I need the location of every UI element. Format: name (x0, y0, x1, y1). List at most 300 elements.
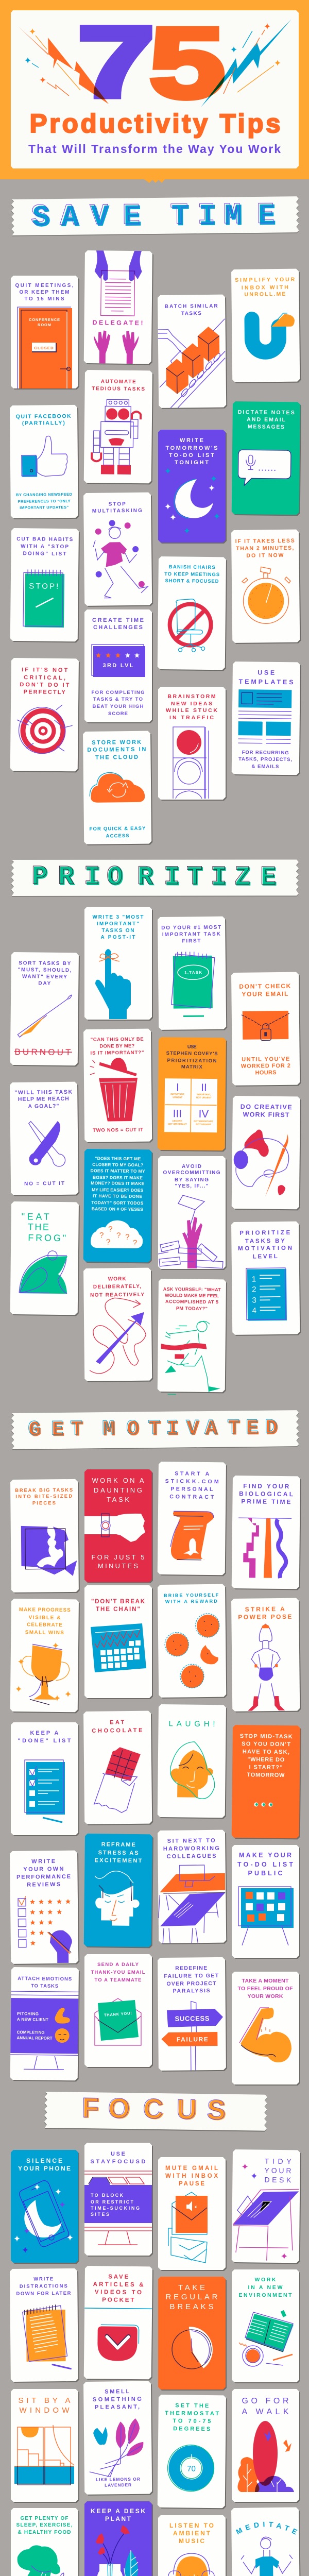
icon: stopwatch (242, 567, 291, 624)
heading: PREFERENCES TO "ONLY (18, 499, 71, 504)
heading: CELEBRATE (27, 1622, 62, 1628)
big number 75: 7 (78, 6, 154, 117)
heading: OVER PROJECT (166, 1980, 216, 1987)
icon: burnt match (18, 994, 72, 1038)
card: does this get me closer (83, 1149, 153, 1263)
card: stayfocusd (84, 2143, 153, 2257)
heading: CUT BAD HABITS (16, 536, 73, 543)
heading (90, 1037, 144, 1056)
heading: BRIBE YOURSELF (164, 1592, 219, 1598)
heading: PERFORMANCE (16, 1874, 71, 1880)
heading: PERFECTLY (24, 689, 66, 696)
chart: prioritization matrix: URGENT (173, 1096, 183, 1098)
heading: WOULD MAKE ME FEEL (165, 1293, 219, 1298)
heading (163, 1286, 221, 1311)
heading: (PARTIALLY) (22, 420, 65, 427)
icon: numbered list: 3 (252, 1296, 256, 1305)
icon: trees and butterflies (237, 2421, 294, 2492)
heading: HAVE TO ASK, (243, 1749, 289, 1755)
heading: SIMPLIFY YOUR (235, 277, 295, 283)
heading: EXCITEMENT (94, 1857, 142, 1864)
icon: thinking cloud: ? (133, 1239, 137, 1247)
heading (164, 1592, 219, 1604)
card: stop mid-task (232, 1725, 301, 1839)
heading: BANISH CHAIRS (169, 564, 215, 570)
heading: WORK (108, 1276, 127, 1282)
heading: THAN 2 MINUTES, (236, 545, 294, 552)
chart: prioritization matrix: NOT IMPORTANT (168, 1123, 187, 1126)
card: not critical (10, 658, 80, 772)
heading: DAY (38, 981, 51, 987)
heading (92, 1477, 144, 1503)
heading: CREATE TIME (92, 617, 144, 623)
heading: REDEFINE (175, 1965, 207, 1972)
heading: TO-DO LIST (169, 452, 214, 459)
heading: WORK (254, 2277, 276, 2283)
card: two minutes (231, 530, 301, 644)
heading: DAUNTING (94, 1486, 142, 1494)
heading: SLEEP, EXERCISE, (16, 2522, 73, 2528)
heading: COLLEAGUES (166, 1853, 216, 1860)
icon: envelope and note (95, 1998, 141, 2045)
text block: ACCESS (106, 833, 129, 839)
heading: STOP (109, 501, 126, 507)
heading (235, 277, 295, 298)
text block: & EMAILS (251, 764, 279, 770)
icon: moon and stars (165, 468, 220, 534)
heading: MATRIX (181, 1064, 203, 1070)
heading: BY SAYING (175, 1177, 209, 1183)
heading (237, 409, 295, 430)
heading: "DONE" LIST (18, 1738, 71, 1744)
icon: thermostat: 70 (187, 2465, 196, 2473)
heading: A WALK (242, 2408, 289, 2416)
card: eat chocolate (83, 1711, 153, 1825)
icon: window view (14, 2425, 74, 2485)
icon: stop notepad (23, 569, 64, 628)
heading: BREAKS (170, 2302, 213, 2311)
icon: hero pose figure (247, 1624, 285, 1711)
heading: TAKE A MOMENT (242, 1978, 289, 1984)
heading (15, 1487, 73, 1506)
icon: calendar checks (91, 1623, 146, 1672)
heading: LAUGH! (169, 1719, 215, 1728)
heading: UNROLL.ME (244, 291, 286, 298)
text block: MY LIFE EASIER? DOES (92, 1187, 144, 1193)
heading: REVIEWS (27, 1882, 60, 1888)
heading: WINDOW (20, 2406, 70, 2415)
text block (89, 826, 146, 839)
heading: START A (175, 1470, 210, 1477)
chart: prioritization matrix: III (173, 1108, 182, 1120)
ribbon: focus: FOCUS (81, 2092, 226, 2126)
card: batch tasks (158, 295, 227, 409)
heading (92, 501, 142, 514)
heading (166, 693, 217, 721)
icon: signpost: SUCCESS (175, 2014, 210, 2023)
icon: finger with string (95, 949, 131, 1019)
heading: SEND A DAILY (97, 1962, 139, 1968)
heading: PAUSE (179, 2181, 204, 2187)
card: mute gmail (158, 2157, 227, 2271)
icon: trash can (90, 1058, 138, 1122)
heading: SORT TASKS BY (19, 960, 71, 967)
heading: USE (111, 2151, 125, 2157)
heading: DO IT NOW (246, 552, 284, 559)
icon: puzzle (21, 1526, 77, 1577)
heading (93, 2274, 144, 2303)
chart: prioritization matrix: NOT URGENT (196, 1096, 212, 1099)
card: power pose (231, 1598, 301, 1713)
heading (91, 2151, 146, 2165)
heading: DISTRACTIONS (20, 2283, 67, 2290)
icon: thumbs up (22, 436, 67, 477)
heading: THANK-YOU EMAIL (91, 1970, 145, 1975)
card: quit facebook (10, 405, 79, 519)
text block: SCORE (108, 711, 128, 717)
heading: TIDY (265, 2157, 292, 2165)
heading: INBOX WITH (242, 284, 288, 291)
heading: HARDWORKING (163, 1845, 219, 1852)
heading (165, 1470, 219, 1500)
icon: desks (158, 1865, 226, 1943)
ribbon: focus (44, 2091, 267, 2132)
heading: FAILURE TO GET (164, 1973, 219, 1979)
text block (238, 750, 292, 770)
heading (237, 1852, 293, 1877)
card: go for a walk (232, 2389, 300, 2503)
icon: cookies (165, 1614, 220, 1688)
heading: SILENCE (26, 2157, 62, 2164)
ribbon: save time: SAVE TIME (31, 198, 274, 234)
text: NO = CUT IT (24, 1181, 64, 1187)
heading (93, 914, 143, 940)
heading: STAYFOCUSD (91, 2159, 146, 2165)
ribbon: prioritize: PRIORITIZE (31, 861, 276, 892)
heading: PM TODAY?" (176, 1306, 208, 1311)
heading: IS IT IMPORTANT?" (90, 1050, 144, 1056)
heading (91, 1599, 145, 1613)
heading: TOMORROW'S (166, 445, 217, 451)
heading (90, 1276, 144, 1298)
icon: no chair sign (169, 599, 211, 652)
heading: THE (28, 1222, 49, 1232)
card: new environment (232, 2269, 300, 2383)
text block: MINUTES (98, 1562, 138, 1570)
heading (238, 1605, 291, 1621)
icon: target (16, 704, 73, 754)
heading: FIND YOUR (243, 1482, 289, 1490)
heading: TASK (107, 1496, 129, 1503)
heading: TEDIOUS TASKS (92, 386, 145, 392)
card: simplify inbox (231, 269, 301, 383)
heading: "MUST, SHOULD, (18, 967, 72, 973)
card: reframe stress (84, 1834, 153, 1948)
text block: BASED ON # OF YESES (92, 1206, 143, 1212)
heading: MAKE PROGRESS (19, 1607, 71, 1613)
icon: speech bubble (238, 450, 291, 486)
icon: thermostat (167, 2445, 214, 2492)
card: break big tasks (10, 1479, 80, 1594)
card: ask yourself (158, 1279, 227, 1395)
heading: ARTICLES & (93, 2281, 144, 2288)
text block: FOR JUST 5 (92, 1553, 144, 1561)
heading: AUTOMATE (101, 379, 136, 385)
icon: laughing face (170, 1741, 215, 1799)
text block: FOR RECURRING (242, 750, 289, 756)
card: attach emotions (10, 1967, 80, 2081)
heading: STOP MID-TASK (240, 1733, 293, 1740)
heading: IN A NEW (248, 2284, 283, 2291)
icon: thinking cloud: ? (106, 1238, 110, 1247)
heading: INTO BITE-SIZED (15, 1494, 72, 1500)
heading: SO YOU DON'T (242, 1741, 290, 1748)
heading: FROG" (28, 1232, 66, 1243)
heading: SOMETHING (93, 2396, 142, 2403)
heading: THE CLOUD (95, 754, 138, 761)
text block: MONEY? DOES IT MAKE (91, 1180, 145, 1186)
heading: YOUR PHONE (18, 2165, 71, 2172)
icon: lavender and butterfly (89, 2418, 144, 2477)
icon: contract scroll (170, 1511, 214, 1560)
heading: "EAT (22, 1211, 49, 1222)
heading: DO YOUR #1 MOST (161, 925, 221, 931)
text block: BOSS? DOES IT MAKE (93, 1175, 143, 1180)
icon: monitor with emotions: ANNUAL REPORT (17, 2036, 53, 2041)
heading: CONTRACT (169, 1494, 214, 1500)
card: keep a done list (11, 1722, 79, 1836)
text block (96, 2477, 140, 2488)
heading: CRITICAL, (24, 674, 65, 681)
heading: KEEP A (30, 1730, 59, 1736)
heading (239, 982, 291, 998)
heading: POCKET (102, 2297, 134, 2303)
card: banish chairs (158, 556, 227, 671)
icon: board with notes (238, 1887, 294, 1945)
heading: THE CHAIN" (96, 1606, 140, 1613)
heading: TO KEEP MEETINGS (164, 571, 219, 578)
card: ambient music (158, 2515, 227, 2576)
heading (166, 1044, 218, 1070)
heading: ACCOMPLISHED AT 5 (165, 1299, 218, 1304)
icon: door (18, 307, 72, 388)
icon: door: CLOSED (34, 346, 54, 350)
icon: browser tabs monitor (84, 2171, 152, 2245)
text block: HOURS (255, 1070, 277, 1076)
card: laugh (158, 1704, 227, 1819)
icon: unroll U (245, 312, 295, 352)
heading: PLEASANT, (95, 2404, 140, 2411)
icon: muted envelopes (168, 2192, 208, 2263)
card: don't check email (231, 972, 301, 1087)
heading: STRIKE A (245, 1605, 285, 1613)
icon: receiving hands (94, 330, 139, 364)
heading: VIDEOS TO (95, 2289, 142, 2296)
heading: TASKS BY (245, 1238, 285, 1245)
icon: broccoli apple banana (18, 2545, 70, 2576)
text block (90, 1156, 145, 1212)
card: eat the frog (10, 1201, 80, 1316)
heading: "WHERE DO (247, 1756, 285, 1763)
heading (15, 283, 74, 302)
heading: TO 70-75 (173, 2418, 211, 2425)
icon: browser tabs monitor: OR RESTRICT (91, 2199, 134, 2205)
heading: IF IT'S NOT (22, 667, 68, 673)
heading: LEVEL (253, 1253, 278, 1260)
icon: thinking cloud: ? (108, 1225, 113, 1234)
card: work on daunting task (84, 1469, 153, 1583)
heading: USE (258, 669, 274, 676)
heading: DONE BY ME? (99, 1043, 135, 1049)
icon: monitor with emotions: PITCHING (17, 2011, 39, 2016)
heading: REFRAME (101, 1841, 135, 1848)
heading: MULTITASKING (92, 508, 142, 514)
text block: UNTIL YOU'VE (242, 1056, 289, 1063)
card: brainstorm (158, 687, 227, 801)
card: automate (84, 370, 153, 484)
heading (264, 2157, 292, 2184)
heading (239, 1482, 293, 1505)
icon: browser tabs monitor: SITES (91, 2212, 109, 2217)
heading (15, 413, 73, 510)
heading: STICKK.COM (165, 1478, 219, 1485)
heading: "WILL THIS TASK (14, 1089, 73, 1096)
icon: chocolate bar (94, 1747, 141, 1813)
heading: STRESS AS (98, 1850, 139, 1856)
header panel (0, 0, 309, 183)
heading: VISIBLE & (29, 1615, 61, 1621)
heading (163, 1838, 219, 1860)
heading: PLANT (105, 2515, 131, 2522)
icon: monitor with emotions (10, 1991, 79, 2070)
heading: SMALL WINS (25, 1630, 64, 1636)
card: creative work first (232, 1096, 301, 1210)
heading (239, 669, 294, 686)
chart: prioritization matrix: NOT IMPORTANT, (194, 1120, 213, 1123)
card: do your number one (158, 917, 227, 1031)
heading: AVOID (182, 1164, 201, 1170)
icon: stop notepad: STOP! (29, 582, 58, 591)
icon: trophy (15, 1642, 72, 1705)
text block (92, 690, 144, 717)
heading (169, 2522, 214, 2545)
chart: energy lines (238, 1518, 291, 1578)
heading: TO TASKS (31, 1983, 58, 1989)
ribbon: get motivated: GET MOTIVATED (29, 1417, 278, 1443)
icon: notepad (23, 2304, 72, 2369)
icon: monitor with emotions: A NEW CLIENT (17, 2017, 48, 2022)
heading (164, 564, 219, 584)
card: prioritize by motivation (231, 1222, 301, 1336)
chart: prioritization matrix: URGENT, (172, 1120, 182, 1122)
text block: "DOES THIS GET ME (95, 1156, 141, 1161)
heading: PARALYSIS (173, 1988, 210, 1994)
text block: FOR COMPLETING (92, 690, 144, 696)
heading: ASK YOURSELF: "WHAT (163, 1286, 221, 1292)
big number 75 (78, 6, 225, 119)
text block: DOES IT MATTER TO MY (91, 1168, 145, 1174)
card: start stickk contract (158, 1462, 227, 1576)
heading: DON'T CHECK (239, 982, 291, 990)
heading: PUBLIC (248, 1870, 282, 1877)
icon: squiggle and arrow (89, 1298, 146, 1374)
heading: DOWN FOR LATER (16, 2291, 71, 2297)
card: keep desk plant (84, 2501, 153, 2576)
chart: star rating checklist (18, 1896, 72, 1963)
heading (18, 960, 72, 987)
heading: STEPHEN COVEY'S (166, 1050, 218, 1057)
icon: frog (19, 1250, 67, 1294)
chart: prioritization matrix: NOT URGENT (196, 1123, 211, 1126)
heading: MOTIVATION (238, 1245, 292, 1252)
card: take regular breaks (158, 2277, 227, 2391)
icon: done checklist (25, 1760, 65, 1822)
icon: door: ROOM (38, 323, 51, 327)
icon: desk (233, 2189, 299, 2261)
chart: prioritization matrix: IMPORTANT, (197, 1093, 211, 1096)
icon: signpost: FAILURE (177, 2036, 208, 2043)
title: Productivity Tips: Productivity Tips (30, 109, 280, 138)
icon: wrist and watch (84, 1514, 145, 1542)
heading: ENVIRONMENT (239, 2292, 292, 2298)
heading (164, 1965, 219, 1994)
icon: browser tabs monitor: TO BLOCK (91, 2193, 124, 2198)
text block: LAVENDER (105, 2482, 131, 2488)
heading (18, 1730, 71, 1744)
icon: blue lightning bolt (201, 19, 291, 107)
card: save articles pocket (84, 2266, 153, 2380)
heading (165, 2402, 219, 2432)
text: TWO NOS = CUT IT (93, 1127, 143, 1133)
heading (92, 379, 145, 392)
heading: WITH A "STOP (21, 544, 69, 550)
heading: SET THE (175, 2402, 209, 2409)
card: meditate (231, 2507, 301, 2576)
heading: TOMORROW (247, 1772, 285, 1778)
ribbon: get motivated: GET MOTIVATED (28, 1416, 277, 1442)
sparkles (241, 2163, 288, 2259)
heading: WRITE (180, 437, 203, 444)
heading: PRIORITIZATION (167, 1058, 217, 1064)
heading: PRIORITIZE (239, 1230, 290, 1236)
heading (166, 2283, 218, 2311)
icon: pocket badge (97, 2325, 139, 2361)
heading: OR KEEP THEM (20, 290, 69, 295)
card: can this only (83, 1029, 153, 1143)
heading: WANT" EVERY (22, 974, 67, 980)
heading: USE (187, 1044, 197, 1050)
heading: IMPORTANT TASK (162, 931, 221, 938)
heading: & HEALTHY FOOD (18, 2530, 71, 2535)
icon: flag hand and papers (158, 1195, 223, 1268)
heading: BATCH SIMILAR (165, 303, 218, 310)
heading (166, 437, 217, 466)
heading: THERMOSTAT (165, 2410, 219, 2417)
icon: numbered list: 2 (252, 1285, 256, 1294)
text block: TASKS, PROJECTS, (238, 756, 292, 762)
text block: LIKE LEMONS OR (96, 2477, 140, 2482)
heading (92, 617, 144, 631)
heading: IN TRAFFIC (169, 715, 214, 721)
heading: WHILE STUCK (166, 707, 217, 714)
heading: IF IT TAKES LESS (235, 538, 295, 545)
heading (91, 2507, 145, 2522)
icon: three dots (254, 1802, 272, 1807)
chart: prioritization matrix: IV (198, 1108, 209, 1120)
icon: template layout (238, 689, 291, 743)
heading: CHOCOLATE (92, 1727, 142, 1734)
heading: SIT BY A (19, 2396, 70, 2405)
